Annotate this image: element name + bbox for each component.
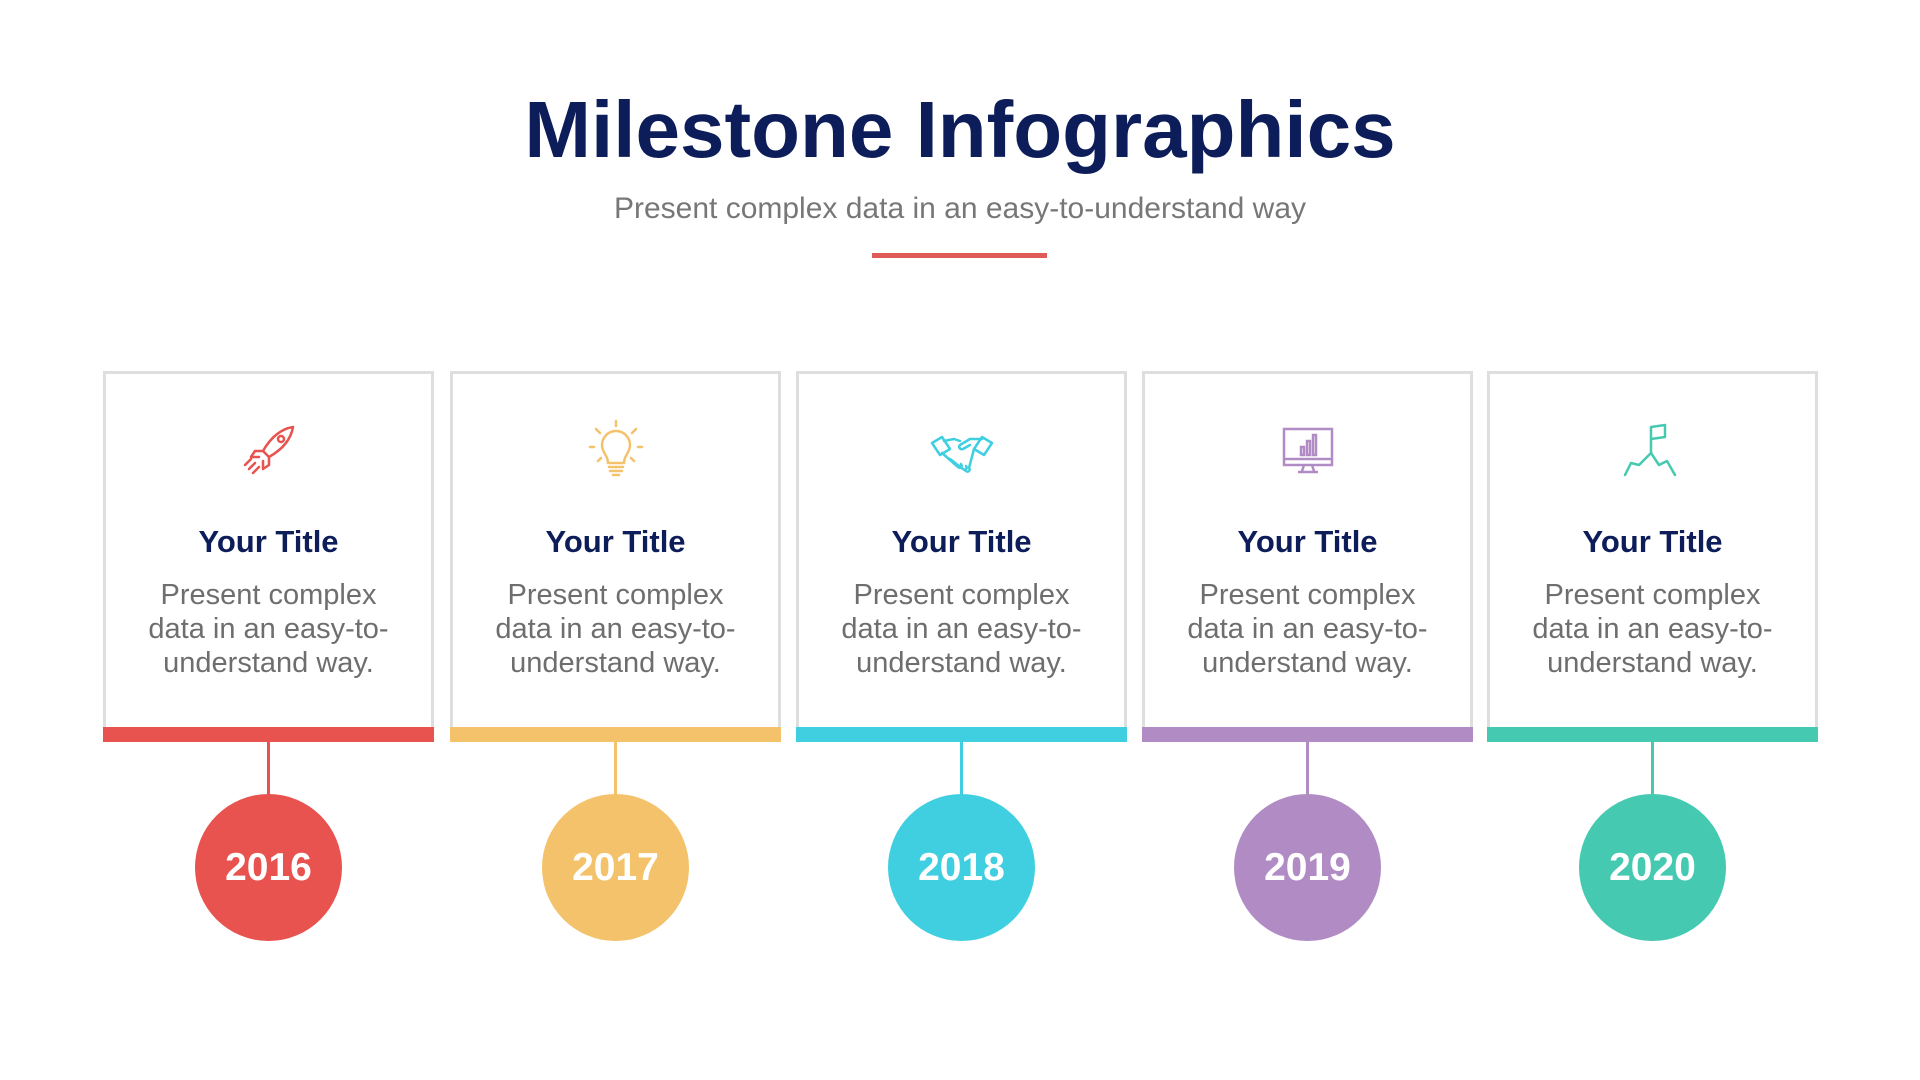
card text: understand way.: [163, 647, 374, 679]
card text: [495, 579, 736, 679]
connector 2018: [960, 742, 963, 797]
card text: Present complex: [1544, 579, 1760, 611]
card title: Your Title: [1582, 524, 1723, 559]
year circle 2016: [195, 794, 342, 941]
card text: Present complex: [1200, 579, 1416, 611]
card text: understand way.: [1202, 647, 1413, 679]
connector 2017: [614, 742, 617, 797]
card text: [148, 579, 389, 679]
card text: [841, 579, 1082, 679]
card text: understand way.: [510, 647, 721, 679]
year circle 2017: 2017: [572, 846, 659, 889]
icon: lightbulb: [588, 420, 644, 476]
panel: 2019: [1142, 371, 1473, 742]
card text: data in an easy-to-: [495, 613, 736, 645]
year circle 2020: [1579, 794, 1726, 941]
subtitle: Present complex data in an easy-to-understand way: [614, 192, 1306, 225]
card text: Present complex: [508, 579, 724, 611]
year circle 2016: 2016: [225, 846, 312, 889]
icon: rocket: [244, 426, 294, 474]
card text: understand way.: [856, 647, 1067, 679]
panel: 2020: [1487, 371, 1818, 742]
year circle 2018: [888, 794, 1035, 941]
card title: Your Title: [891, 524, 1032, 559]
card title: Your Title: [198, 524, 339, 559]
card text: data in an easy-to-: [148, 613, 389, 645]
card title: Your Title: [545, 524, 686, 559]
icon: mountain flag: [1624, 424, 1676, 476]
card text: understand way.: [1547, 647, 1758, 679]
year circle 2020: 2020: [1609, 846, 1696, 889]
connector 2019: [1306, 742, 1309, 797]
card text: Present complex: [160, 579, 376, 611]
icon: monitor chart: [1282, 428, 1334, 474]
card text: data in an easy-to-: [1532, 613, 1773, 645]
panel: 2016: [103, 371, 434, 742]
year circle 2019: 2019: [1264, 846, 1351, 889]
title: Milestone Infographics: [524, 85, 1396, 174]
year circle 2019: [1234, 794, 1381, 941]
title underline: [872, 253, 1047, 258]
card text: [1532, 579, 1773, 679]
card text: data in an easy-to-: [841, 613, 1082, 645]
panel: 2018: [796, 371, 1127, 742]
card text: [1187, 579, 1428, 679]
year circle 2018: 2018: [918, 846, 1005, 889]
connector 2020: [1651, 742, 1654, 797]
connector 2016: [267, 742, 270, 797]
card text: data in an easy-to-: [1187, 613, 1428, 645]
icon: handshake: [930, 436, 994, 473]
card text: Present complex: [854, 579, 1070, 611]
panel: 2017: [450, 371, 781, 742]
year circle 2017: [542, 794, 689, 941]
card title: Your Title: [1237, 524, 1378, 559]
